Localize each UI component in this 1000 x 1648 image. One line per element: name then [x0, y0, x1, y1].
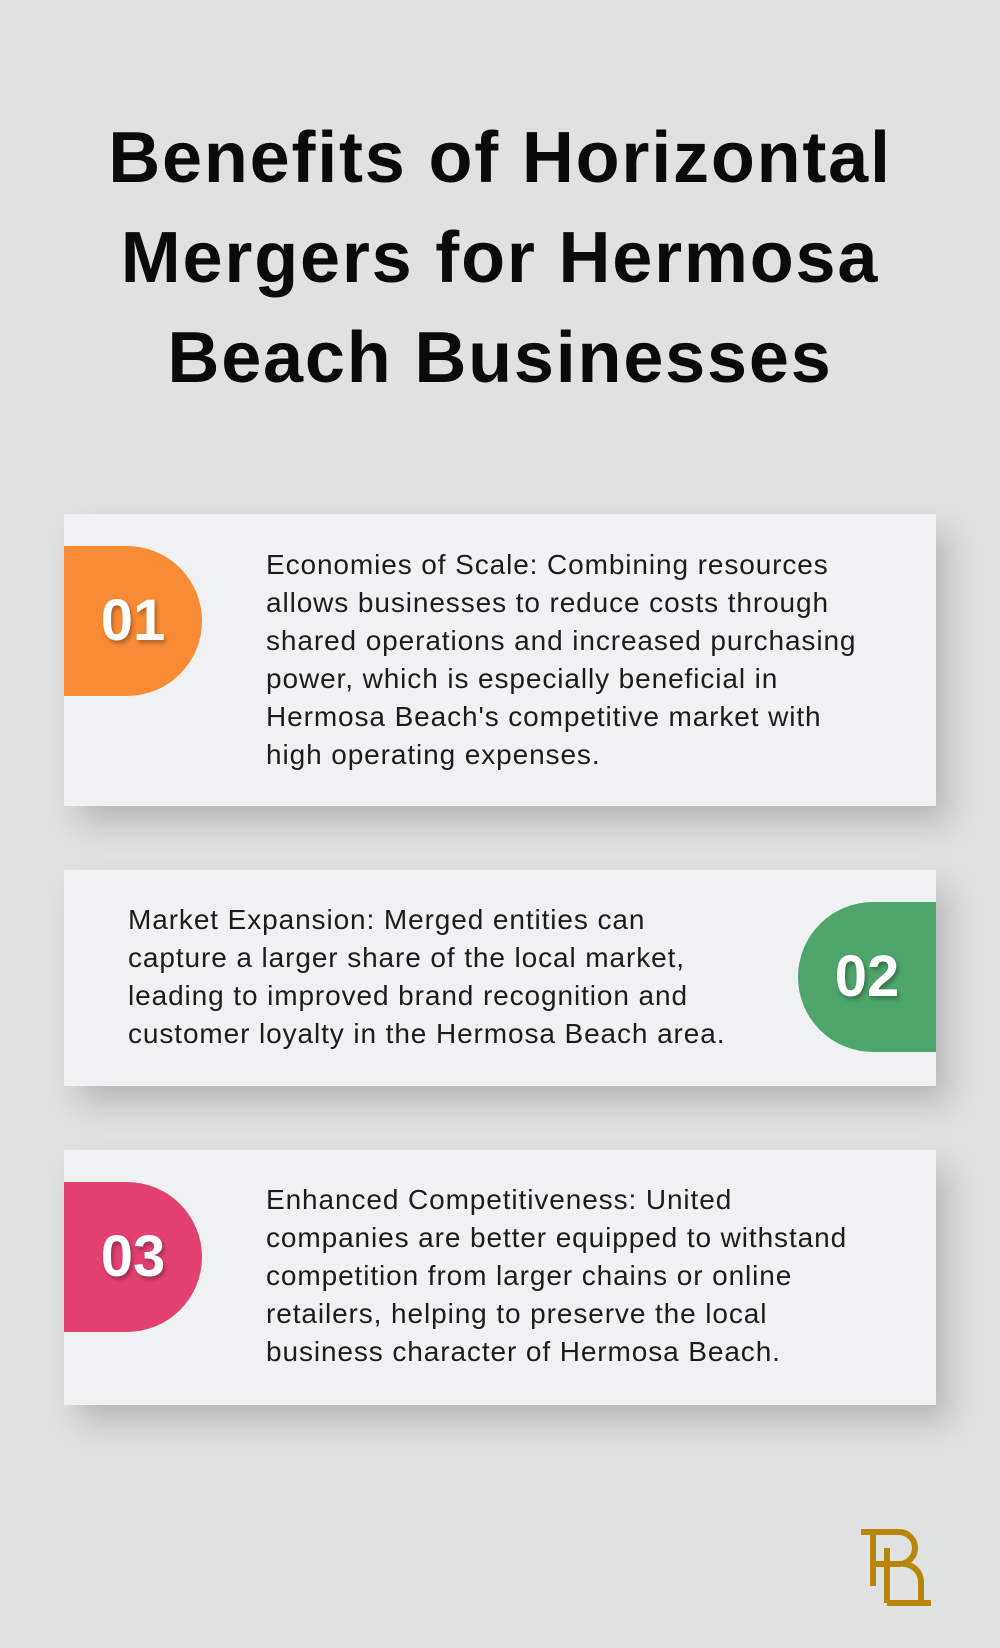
- logo: [861, 1529, 931, 1606]
- title: Beach Businesses: [167, 318, 833, 398]
- panel: card 02: [64, 870, 936, 1086]
- badge 03: 03: [101, 1224, 165, 1289]
- text: economies of scale: Hermosa Beach's competitive market with: [266, 701, 822, 732]
- title: Benefits of Horizontal: [108, 118, 892, 198]
- text: enhanced competitiveness: retailers, helping to preserve the local: [266, 1298, 767, 1329]
- text: market expansion: Market Expansion: Merged entities can: [128, 904, 645, 935]
- text: market expansion: customer loyalty in the Hermosa Beach area.: [128, 1018, 725, 1049]
- text: economies of scale: shared operations and increased purchasing: [266, 625, 856, 656]
- text: enhanced competitiveness: companies are better equipped to withstand: [266, 1222, 847, 1253]
- text: enhanced competitiveness: [266, 1184, 847, 1367]
- text: market expansion: leading to improved brand recognition and: [128, 980, 688, 1011]
- text: enhanced competitiveness: competition from larger chains or online: [266, 1260, 792, 1291]
- badge 02: 02: [835, 944, 899, 1009]
- text: enhanced competitiveness: Enhanced Competitiveness: United: [266, 1184, 732, 1215]
- panel: card 03: [64, 1150, 936, 1405]
- text: economies of scale: [266, 549, 856, 770]
- title: Mergers for Hermosa: [121, 218, 879, 298]
- text: economies of scale: high operating expenses.: [266, 739, 600, 770]
- text: market expansion: [128, 904, 725, 1049]
- badge 01: 01: [101, 588, 165, 653]
- panel: card 01: [64, 514, 936, 806]
- badge 03: [64, 1182, 202, 1332]
- text: economies of scale: allows businesses to reduce costs through: [266, 587, 829, 618]
- text: market expansion: capture a larger share of the local market,: [128, 942, 685, 973]
- text: enhanced competitiveness: business character of Hermosa Beach.: [266, 1336, 781, 1367]
- text: economies of scale: Economies of Scale: Combining resources: [266, 549, 829, 580]
- badge 02: [798, 902, 936, 1052]
- title: [108, 118, 892, 398]
- text: economies of scale: power, which is especially beneficial in: [266, 663, 778, 694]
- badge 01: [64, 546, 202, 696]
